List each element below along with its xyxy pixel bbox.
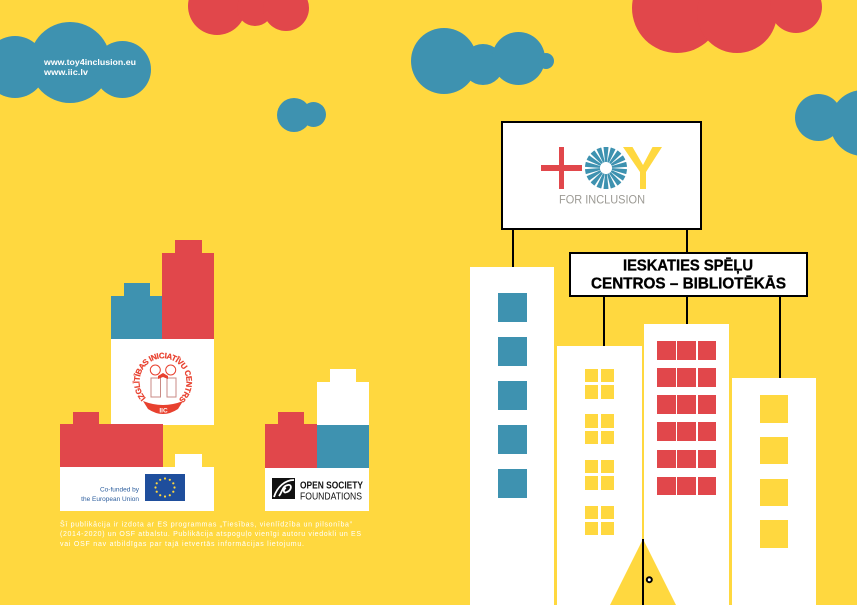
- OSF wordmark: FOUNDATIONS: [300, 492, 362, 502]
- door: [610, 539, 676, 605]
- disclaimer text: vai OSF nav atbildīgas par tajā ietvertās informācijas lietojumu.: [60, 541, 304, 548]
- co-funded caption: Co-funded by: [100, 486, 140, 494]
- building 1: blue windows: [470, 267, 554, 605]
- building 2: yellow paned windows: [557, 346, 642, 605]
- logo flower: [585, 148, 627, 188]
- cloud: red top right: [632, 0, 822, 53]
- building 3: red windows: [644, 324, 729, 605]
- OSF wordmark: [300, 480, 363, 502]
- co-funded caption: the European Union: [81, 496, 139, 503]
- logo letter Y: [623, 147, 662, 189]
- cloud: red top centre: [188, 0, 309, 35]
- cloud: blue centre: [411, 28, 554, 94]
- disclaimer text: (2014-2020) un OSF atbalstu. Publikācija atspoguļo vienīgi autoru viedokli un ES: [60, 531, 361, 538]
- building 4: yellow windows: [732, 378, 816, 605]
- IIC round logo: IZGLĪTĪBAS INICIATĪVU CENTRS: [132, 352, 192, 402]
- website links: www.iic.lv: [43, 68, 89, 77]
- disclaimer text: [60, 520, 361, 548]
- EU flag: [145, 474, 185, 501]
- title text: CENTROS – BIBLIOTĒKĀS: [591, 276, 786, 292]
- title sign: [570, 253, 807, 296]
- cloud: small blue: [277, 98, 326, 132]
- logo caption: FOR INCLUSION: [559, 194, 645, 206]
- title text: [591, 258, 786, 292]
- cloud: blue top left with website links: [0, 22, 151, 103]
- lego block stack: EU: [60, 412, 214, 511]
- title text: IESKATIES SPĒĻU: [623, 258, 753, 274]
- disclaimer text: Šī publikācija ir izdota ar ES programmas „Tiesības, vienlīdzība un pilsonība”: [60, 520, 353, 528]
- OSF emblem: [272, 478, 295, 499]
- cloud: blue right: [795, 90, 857, 156]
- IIC round logo: IIC: [159, 408, 168, 414]
- lego block stack: OSF: [265, 369, 369, 511]
- OSF wordmark: OPEN SOCIETY: [300, 480, 363, 492]
- lego block stack: IIC: [111, 240, 214, 425]
- co-funded caption: [81, 486, 140, 503]
- website links: [43, 58, 136, 77]
- website links: www.toy4inclusion.eu: [43, 58, 136, 67]
- sign posts: [512, 229, 781, 379]
- logo plus sign: [541, 147, 582, 189]
- billboard: toy for inclusion logo: [502, 122, 701, 229]
